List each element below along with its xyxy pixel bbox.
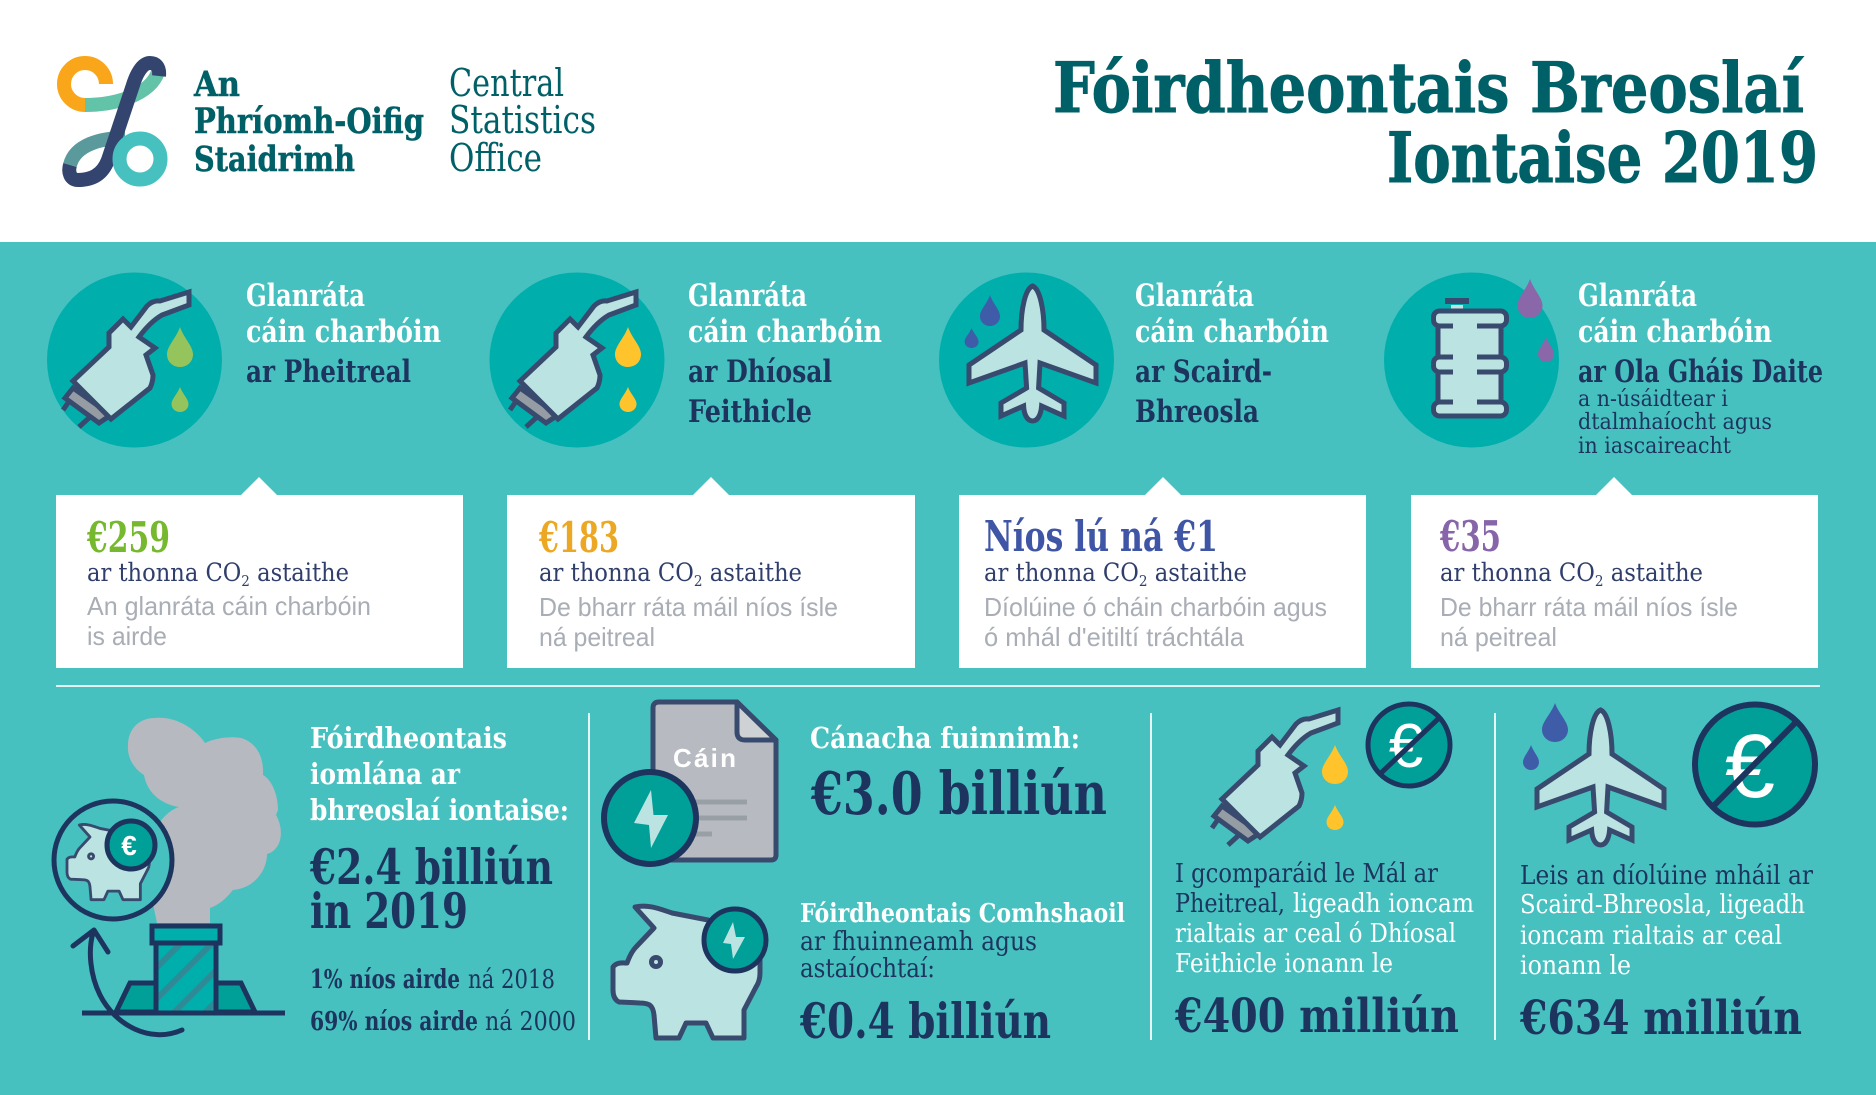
panel: jet fuel bbox=[939, 272, 1366, 668]
heading: diesel: ar Dhíosal bbox=[688, 354, 832, 390]
heading: marked gas oil: in iascaireacht bbox=[1578, 434, 1731, 459]
text: diesel comparison: Pheitreal, bbox=[1175, 889, 1285, 919]
text: environmental subsidies label: astaíochtaí: bbox=[800, 954, 935, 984]
panel: aviation revenue foregone bbox=[1519, 703, 1815, 1046]
logo mark bbox=[64, 63, 160, 180]
card: petrol: ar thonna CO bbox=[87, 558, 258, 587]
logo text: English bbox=[449, 61, 596, 180]
text: total subsidies label: bhreoslaí iontaise: bbox=[310, 793, 569, 827]
text: diesel comparison: Feithicle ionann le bbox=[1175, 949, 1393, 979]
heading: jet fuel bbox=[1135, 278, 1329, 430]
icon: oil barrel bbox=[1384, 272, 1559, 448]
text: comparison with earlier years: 69% níos airde bbox=[310, 1007, 478, 1037]
text: total subsidies label: iomlána ar bbox=[310, 757, 461, 791]
text: diesel comparison: rialtais ar ceal ó Dhíosal bbox=[1175, 919, 1456, 949]
text: diesel comparison: ligeadh ioncam bbox=[1293, 889, 1474, 919]
text: energy taxes label: Cánacha fuinnimh: bbox=[810, 721, 1080, 755]
text: environmental subsidies label bbox=[800, 899, 1125, 984]
text: aviation exemption bbox=[1520, 861, 1814, 981]
heading: petrol: ar Pheitreal bbox=[246, 354, 411, 390]
text: environmental subsidies label: Fóirdheontais Comhshaoil bbox=[800, 899, 1125, 929]
heading: marked gas oil: cáin charbóin bbox=[1578, 314, 1772, 350]
card: marked gas oil: De bharr ráta máil níos ísle bbox=[1440, 592, 1738, 622]
icon: smokestack with piggy bank: € bbox=[121, 830, 137, 861]
card: diesel: De bharr ráta máil níos ísle bbox=[539, 592, 838, 622]
heading: jet fuel: Glanráta bbox=[1135, 278, 1254, 314]
card: petrol: An glanráta cáin charbóin bbox=[87, 591, 371, 621]
text: comparison with earlier years: ná 2000 bbox=[485, 1007, 576, 1037]
text: comparison with earlier years bbox=[310, 965, 576, 1037]
heading: petrol: cáin charbóin bbox=[246, 314, 441, 350]
text: diesel comparison bbox=[1175, 859, 1474, 979]
panel: petrol bbox=[47, 272, 463, 668]
card: petrol: 2 bbox=[241, 572, 250, 590]
panel: total subsidies bbox=[54, 718, 576, 1037]
heading: diesel: Glanráta bbox=[688, 278, 807, 314]
icon: diesel nozzle bbox=[490, 272, 664, 448]
stat: €0.4 billion: €0.4 billiún bbox=[799, 992, 1051, 1050]
heading: petrol: Glanráta bbox=[246, 278, 365, 314]
card: jet fuel: ar thonna CO bbox=[984, 558, 1155, 587]
title bbox=[1053, 48, 1818, 199]
icon: plane and no-euro sign: € bbox=[1725, 717, 1775, 817]
card: petrol bbox=[56, 477, 463, 668]
card: marked gas oil: ar thonna CO bbox=[1440, 558, 1611, 587]
card: jet fuel: Níos lú ná €1 bbox=[984, 512, 1218, 561]
heading: marked gas oil: Glanráta bbox=[1578, 278, 1697, 314]
logo text: English: Office bbox=[449, 136, 542, 180]
card: jet fuel bbox=[959, 477, 1366, 668]
panel: diesel revenue foregone bbox=[1174, 704, 1474, 1044]
heading: jet fuel: Bhreosla bbox=[1135, 394, 1259, 430]
heading: marked gas oil: dtalmhaíocht agus bbox=[1578, 410, 1772, 435]
card: diesel: 2 bbox=[694, 572, 703, 590]
card: jet fuel: 2 bbox=[1139, 572, 1148, 590]
text: environmental subsidies label: ar fhuinneamh agus bbox=[800, 927, 1037, 957]
heading: jet fuel: ar Scaird- bbox=[1135, 354, 1272, 390]
heading: diesel bbox=[688, 278, 882, 430]
stat: €400 million: €400 milliún bbox=[1174, 989, 1459, 1044]
logo text: Irish: Phríomh-Oifig bbox=[194, 101, 424, 142]
text: aviation exemption: ionann le bbox=[1520, 951, 1631, 981]
logo text: Irish bbox=[193, 64, 424, 180]
heading: diesel: cáin charbóin bbox=[688, 314, 882, 350]
heading: marked gas oil bbox=[1578, 278, 1823, 459]
icon: tax document: Cáin bbox=[673, 743, 740, 773]
stat: €3.0 billion: €3.0 billiún bbox=[810, 759, 1107, 828]
panel: vehicle diesel bbox=[490, 272, 915, 668]
card: marked gas oil bbox=[1411, 477, 1818, 668]
card: diesel bbox=[507, 477, 915, 668]
icon: tax document bbox=[604, 702, 776, 864]
stat: €2.4 billion in 2019: €2.4 billiún bbox=[309, 838, 553, 896]
teal background panel bbox=[0, 242, 1876, 1095]
text: comparison with earlier years: 1% níos airde bbox=[310, 965, 460, 995]
icon: nozzle and no-euro sign bbox=[1212, 704, 1450, 845]
card: marked gas oil: astaithe bbox=[1604, 558, 1703, 587]
text: total subsidies label: Fóirdheontais bbox=[310, 721, 507, 755]
icon: plane bbox=[939, 272, 1114, 448]
text: comparison with earlier years: ná 2018 bbox=[468, 965, 555, 995]
icon: smokestack with piggy bank bbox=[54, 718, 285, 1035]
card: diesel: €183 bbox=[538, 513, 619, 562]
heading: jet fuel: cáin charbóin bbox=[1135, 314, 1329, 350]
icon: plane and no-euro sign bbox=[1523, 703, 1815, 845]
logo text: English: Statistics bbox=[449, 98, 596, 142]
logo text: Irish: Staidrimh bbox=[194, 139, 355, 180]
icon: piggy bank with energy coin bbox=[613, 906, 766, 1038]
panel: marked gas oil bbox=[1384, 272, 1823, 668]
stat: €2.4 billion in 2019: in 2019 bbox=[310, 882, 468, 940]
card: diesel: astaithe bbox=[703, 558, 802, 587]
heading: marked gas oil: a n-úsáidtear i bbox=[1578, 387, 1728, 412]
heading: diesel: Feithicle bbox=[688, 394, 812, 430]
text: aviation exemption: ioncam rialtais ar ceal bbox=[1520, 921, 1782, 951]
text: total subsidies label bbox=[310, 721, 569, 827]
logo text: Irish: An bbox=[193, 64, 240, 105]
text: aviation exemption: Leis an díolúine mháil ar bbox=[1520, 861, 1814, 891]
card: petrol: is airde bbox=[87, 621, 167, 651]
icon: nozzle and no-euro sign: € bbox=[1389, 712, 1423, 781]
card: diesel: ar thonna CO bbox=[539, 558, 710, 587]
icon: petrol nozzle bbox=[47, 272, 222, 448]
card: jet fuel: astaithe bbox=[1148, 558, 1247, 587]
card: jet fuel: Díolúine ó cháin charbóin agus bbox=[984, 592, 1327, 622]
card: marked gas oil: 2 bbox=[1595, 572, 1604, 590]
card: jet fuel: ó mhál d'eitiltí tráchtála bbox=[984, 622, 1245, 652]
logo: Central Statistics Office bbox=[64, 61, 596, 180]
text: diesel comparison: I gcomparáid le Mál ar bbox=[1175, 859, 1438, 889]
card: diesel: ná peitreal bbox=[539, 622, 655, 652]
stat: €2.4 billion in 2019 bbox=[309, 838, 553, 940]
card: marked gas oil: €35 bbox=[1439, 512, 1501, 561]
stat: €634 million: €634 milliún bbox=[1519, 991, 1802, 1046]
card: marked gas oil: ná peitreal bbox=[1440, 622, 1557, 652]
logo text: English: Central bbox=[449, 61, 564, 105]
card: petrol: €259 bbox=[86, 513, 170, 562]
panel: energy taxes bbox=[604, 702, 1125, 1050]
text: aviation exemption: Scaird-Bhreosla, ligeadh bbox=[1520, 890, 1805, 920]
heading: petrol bbox=[246, 278, 441, 390]
card: petrol: astaithe bbox=[250, 558, 349, 587]
